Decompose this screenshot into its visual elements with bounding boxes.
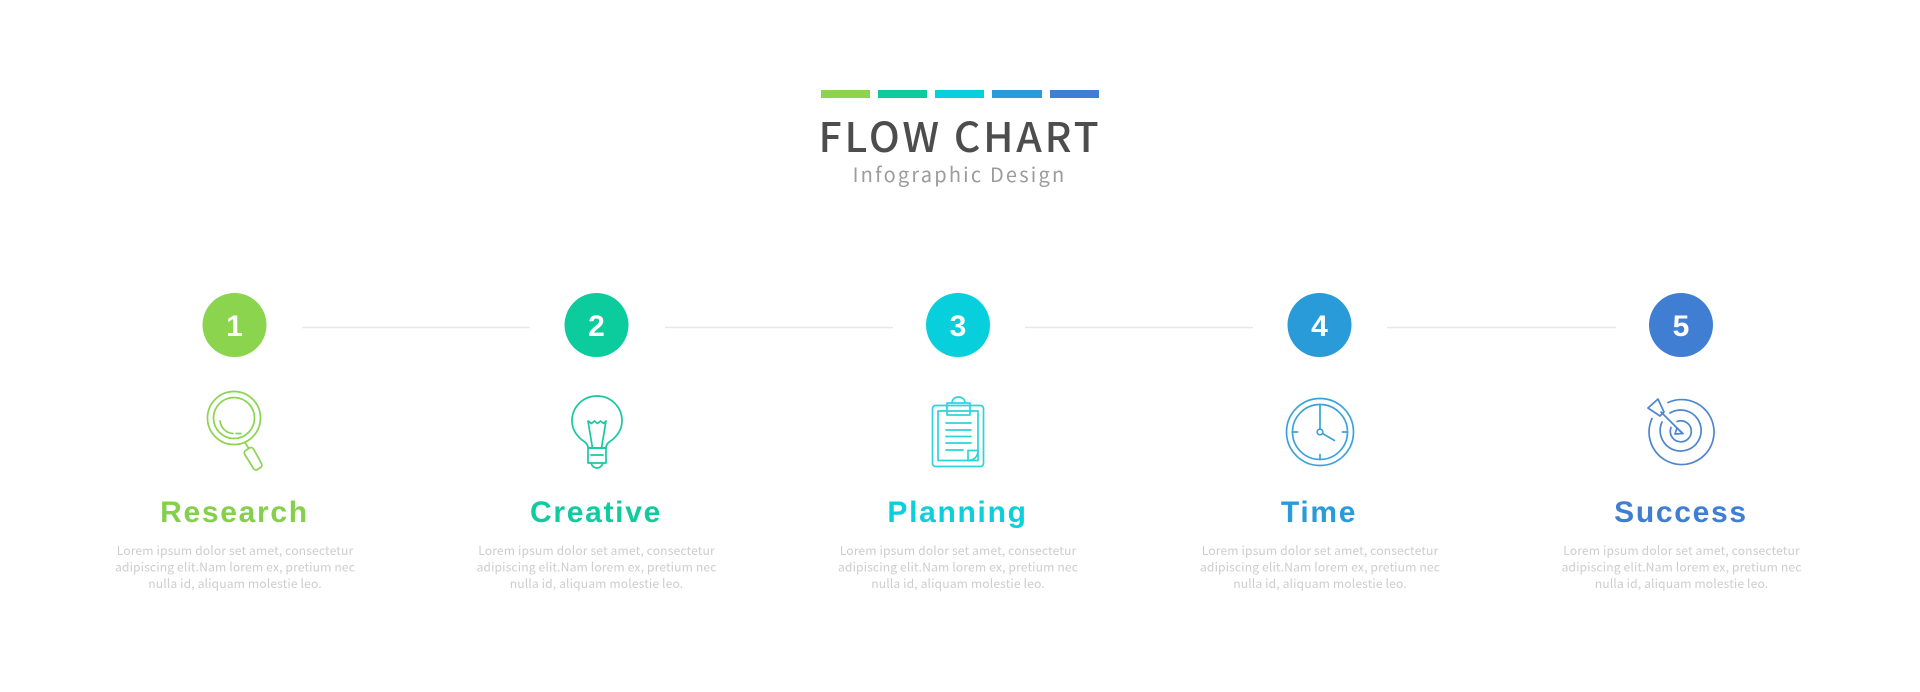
description 2: nulla id, aliquam molestie leo.	[510, 574, 683, 592]
description 3: adipiscing elit.Nam lorem ex, pretium nec	[838, 558, 1078, 576]
label: Research: Research	[160, 496, 309, 529]
icon: magnifying glass	[208, 392, 262, 470]
step 1: research	[115, 293, 355, 592]
icon: target with arrow	[1648, 399, 1714, 465]
number badge 1	[202, 293, 266, 357]
colour bars	[821, 90, 1099, 98]
icon: light bulb	[572, 396, 622, 468]
subtitle: Infographic Design	[853, 159, 1066, 188]
step 3: planning	[838, 293, 1078, 592]
number badge 3	[926, 293, 990, 357]
description 4: Lorem ipsum dolor set amet, consectetur	[1202, 541, 1438, 559]
description 5: adipiscing elit.Nam lorem ex, pretium nec	[1561, 558, 1802, 576]
description 4: adipiscing elit.Nam lorem ex, pretium nec	[1200, 558, 1440, 576]
icon: clipboard	[932, 397, 984, 466]
description 2	[476, 541, 717, 592]
description 1: adipiscing elit.Nam lorem ex, pretium nec	[115, 558, 355, 576]
description 2: adipiscing elit.Nam lorem ex, pretium nec	[476, 558, 717, 576]
description 5: nulla id, aliquam molestie leo.	[1595, 574, 1768, 592]
description 2: Lorem ipsum dolor set amet, consectetur	[478, 541, 715, 559]
number badge 4	[1288, 293, 1352, 357]
label: Creative: Creative	[530, 496, 662, 529]
step 4: time	[1200, 293, 1440, 592]
description 4	[1200, 541, 1440, 592]
title: FLOW CHART	[819, 104, 1101, 164]
label: Time: Time	[1281, 496, 1357, 529]
label: Success: Success	[1614, 496, 1748, 529]
step 5: success	[1561, 293, 1802, 592]
description 4: nulla id, aliquam molestie leo.	[1233, 574, 1407, 592]
description 1	[115, 541, 355, 592]
description 1: nulla id, aliquam molestie leo.	[148, 574, 322, 592]
description 3: Lorem ipsum dolor set amet, consectetur	[840, 541, 1076, 559]
description 1: Lorem ipsum dolor set amet, consectetur	[117, 541, 353, 559]
description 3	[838, 541, 1078, 592]
description 5	[1561, 541, 1802, 592]
icon: clock	[1286, 398, 1354, 466]
description 3: nulla id, aliquam molestie leo.	[871, 574, 1045, 592]
number badge 5	[1649, 293, 1713, 357]
number badge 2	[564, 293, 628, 357]
description 5: Lorem ipsum dolor set amet, consectetur	[1563, 541, 1800, 559]
number badge 5: 5	[1673, 310, 1689, 343]
number badge 3: 3	[950, 310, 966, 343]
step 2: creative	[476, 293, 717, 592]
number badge 4: 4	[1311, 310, 1328, 343]
connector lines	[302, 326, 1616, 328]
number badge 1: 1	[226, 310, 243, 343]
number badge 2: 2	[588, 310, 605, 343]
label: Planning: Planning	[887, 496, 1028, 529]
